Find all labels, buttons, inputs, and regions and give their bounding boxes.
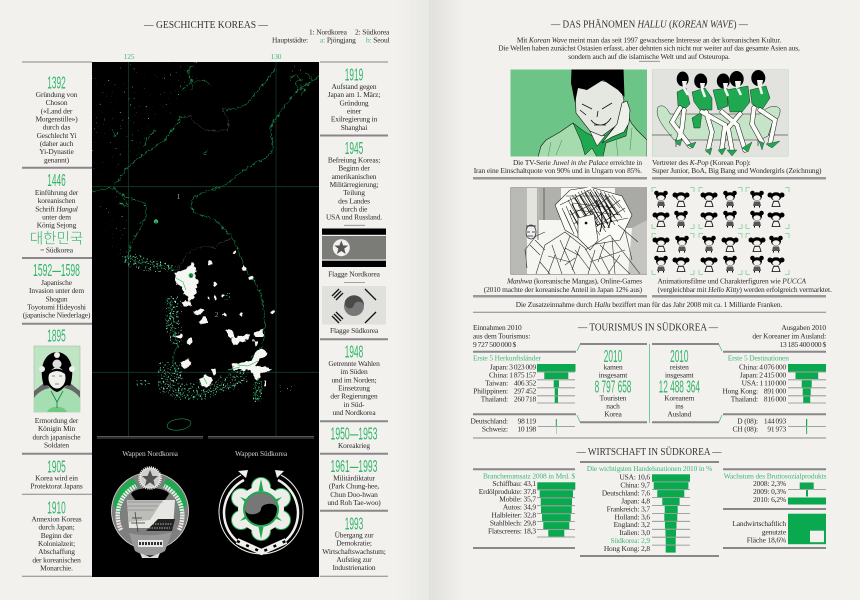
bar chart: GDP growth: 2009: 0,3%	[753, 487, 786, 496]
event 1446	[30, 171, 83, 254]
event 1895: 1895	[47, 326, 66, 346]
bar chart: destinations: 816 000	[764, 394, 786, 404]
note: extra revenue: Die Zusatzeinnahme durch Hallu beziffert man für das Jahr 2008 mit ca. 1 Milliarde Franken.	[516, 300, 782, 309]
dresses	[677, 86, 770, 128]
longitude labels: 125	[124, 52, 135, 61]
bar chart: origin countries: Taiwan:	[485, 378, 508, 388]
event 1919: Aufstand gegen	[332, 82, 377, 91]
bar chart: industry revenue: Autos: 34,9	[503, 503, 536, 512]
event 1895: durch japanische	[33, 432, 81, 441]
bar chart: trade nations: Japan: 4,8	[621, 496, 650, 505]
bar chart: origin countries: 1 875 157	[509, 370, 537, 380]
bar chart: trade nations: Hong Kong: 2,8	[604, 544, 650, 553]
event 1895	[33, 326, 81, 450]
bar chart: GDP growth	[723, 469, 827, 509]
map legend	[272, 28, 390, 44]
event 1945: 1945	[345, 139, 363, 158]
bar chart: GDP growth: Wachstum des Bruttosozialprodukts	[724, 471, 827, 480]
event 1993: Industrienation	[333, 563, 376, 572]
event 1948: Einsetzung	[338, 384, 370, 392]
event 1919: Shanghai	[341, 123, 367, 132]
bar chart: industry revenue: Flatscreens: 18,3	[488, 526, 536, 536]
left timeline column	[22, 62, 92, 576]
map legend: 2: Südkorea	[355, 28, 390, 36]
event 1910: Beginn der	[41, 531, 73, 540]
coastlines	[92, 65, 319, 400]
event 1919: Exilregierung in	[331, 115, 378, 124]
event 1961-1993: 1961—1993	[331, 455, 378, 476]
capital markers	[154, 219, 193, 278]
caption: K-pop: Super Junior, BoA, Big Bang und Wondergirls (Zeichnung)	[652, 166, 822, 175]
event 1592-1598: Toyotomi Hideyoshi	[27, 302, 86, 311]
bar chart: origin countries: 98 119	[518, 416, 536, 426]
bar chart: origin countries: 10 198	[517, 424, 537, 434]
event 1919: einer	[347, 106, 362, 116]
caption: Pucca: (vergleichbar mit Hello Kitty) werden erfolgreich vermarktet.	[658, 285, 832, 294]
bar chart: origin countries: Deutschland:	[470, 416, 508, 426]
event 1910: Kolonialzeit;	[38, 539, 75, 548]
event 1945: Beginn der	[338, 164, 370, 173]
inbound stat	[595, 347, 632, 418]
farmland share	[723, 514, 826, 548]
bar chart: destinations: Erste 5 Destinationen	[728, 354, 789, 363]
bar chart: industry revenue: Halbleiter: 32,8	[492, 511, 536, 520]
event 1993: Aufstieg zur	[336, 555, 372, 564]
inbound stat: 8 797 658	[595, 377, 632, 397]
caption: Flagge Nordkorea: Flagge Nordkorea	[328, 270, 381, 278]
bar chart: destinations	[722, 354, 826, 434]
caption: Manhwa: (2010 machte der koreanische Anteil in Japan 12% aus)	[484, 285, 643, 294]
event 1910: 1910	[47, 498, 66, 517]
event 1446: Schrift Hangul	[35, 204, 78, 213]
longitude labels	[124, 52, 282, 61]
event 1910: Monarchie.	[40, 564, 73, 572]
inbound stat: Korea	[604, 410, 623, 418]
event 1945: Militärregierung;	[330, 180, 378, 189]
farmland share: Landwirtschaftlich	[732, 519, 786, 528]
intro text: Mit Korean Wave meint man das seit 1997 gewachsene Interesse an der koreanischen Kultur.	[517, 36, 781, 44]
map legend: Hauptstädte:	[272, 36, 308, 44]
bar chart: industry revenue: Erdölprodukte: 37,8	[479, 487, 536, 496]
outbound stat	[659, 347, 700, 418]
income text: 9 727 500 000 $	[473, 340, 517, 349]
shoes	[675, 139, 780, 156]
farmland share: Fläche 18,6%	[747, 536, 786, 544]
event 1392: durch das	[43, 123, 70, 132]
event 1993: Wirtschaftswachstum;	[322, 547, 386, 556]
event 1945: amerikanischen	[332, 172, 377, 181]
bar chart: trade nations	[580, 462, 719, 556]
event 1392: Yi-Dynastie	[39, 147, 75, 156]
map legend: 1: Nordkorea	[309, 28, 348, 36]
caption: K-pop: Vertreter des K-Pop (Korean Pop):	[652, 158, 751, 167]
outbound stat: 12 488 364	[659, 377, 700, 397]
event 1446: König Sejong	[37, 221, 77, 230]
income text: Einnahmen 2010	[473, 323, 522, 332]
bar chart: destinations: China:	[739, 362, 758, 372]
bar chart: origin countries: Erste 5 Herkunftsländer	[473, 354, 541, 363]
farmland share: genutzte	[762, 528, 787, 536]
capital markers: a	[155, 219, 157, 224]
heads	[677, 70, 765, 97]
event 1910	[31, 498, 82, 572]
heading: Geschichte Koreas: — GESCHICHTE KOREAS —	[143, 20, 269, 31]
inbound stat: kamen	[603, 362, 623, 372]
event 1446: = Südkorea	[40, 246, 74, 254]
heading: Das Phänomen Hallu: — DAS PHÄNOMEN HALLU (KOREAN WAVE) —	[550, 18, 749, 30]
event 1948: und Nordkorea	[333, 408, 376, 417]
bar chart: destinations: Thailand:	[731, 394, 758, 404]
event 1895: Soldaten	[44, 440, 69, 450]
illustration: Pucca characters	[652, 188, 789, 274]
event 1919: Japan am 1. März;	[328, 90, 380, 99]
event 1592-1598: Shogun	[46, 294, 68, 303]
sofa	[657, 106, 780, 140]
bar chart: industry revenue: Stahlblech: 29,8	[490, 519, 536, 528]
event 1948: im Süden	[340, 367, 368, 376]
bar chart: GDP growth: 2010: 6,2%	[753, 495, 786, 504]
event 1945: Teilung	[343, 188, 365, 197]
illustration: manhwa	[510, 187, 647, 274]
bar chart: destinations: USA:	[742, 378, 758, 388]
event 1446: 1446	[47, 171, 66, 190]
event 1592-1598: Japanische	[41, 278, 73, 287]
heading: Tourismus: — TOURISMUS IN SÜDKOREA —	[577, 322, 719, 334]
longitude labels: 130	[271, 52, 282, 61]
caption: Manhwa: Manhwa (koreanische Mangas), Online-Games	[507, 277, 642, 286]
event 1948	[328, 342, 380, 417]
bar chart: trade nations: England: 3,2	[614, 520, 650, 529]
expenses text: Ausgaben 2010	[781, 323, 826, 332]
inbound stat: 2010	[604, 347, 622, 366]
bar chart: trade nations: Deutschland: 7,6	[602, 488, 650, 498]
book fold shading	[395, 0, 465, 600]
event 1945: Befreiung Koreas;	[328, 156, 380, 164]
event 1945: des Landes	[338, 196, 370, 205]
event 1446: unter dem	[42, 212, 71, 222]
caption: TV series: Die TV-Serie Juwel in the Palace erreichte in	[513, 158, 642, 167]
expenses text: 13 185 400 000 $	[779, 340, 826, 349]
event 1905	[30, 457, 83, 491]
event 1993: Übergang zur	[335, 530, 374, 540]
bar chart: industry revenue: Mobile: 35,7	[499, 495, 536, 504]
event 1905: Korea wird ein	[35, 474, 78, 482]
bar chart: trade nations: Holland: 3,6	[614, 512, 650, 521]
bar chart: origin countries: 3 023 009	[509, 362, 537, 372]
capital markers: b	[190, 273, 193, 278]
bar chart: industry revenue	[473, 469, 575, 548]
event 1392: Choson	[46, 98, 68, 107]
bar chart: trade nations: Italien: 3,0	[619, 528, 650, 537]
bar chart: origin countries: 297 452	[514, 386, 536, 396]
caption: Wappen Nordkorea: Wappen Nordkorea	[122, 449, 179, 458]
expenses text: der Koreaner im Ausland:	[752, 332, 826, 340]
event 1392: Morgenstille»)	[35, 114, 78, 124]
map legend: a: Pjöngjang	[320, 36, 356, 44]
event 1910: Abschaffung	[38, 547, 75, 556]
bar chart: origin countries: 406 352	[514, 378, 536, 388]
event 1919: Gründung	[339, 98, 369, 107]
caption: TV series: Iran eine Einschaltquote von 90% und in Ungarn von 85%.	[474, 166, 642, 175]
outbound stat: Koreanern	[664, 393, 695, 402]
caption: Wappen Südkorea: Wappen Südkorea	[235, 449, 288, 458]
event 1392: 1392	[47, 73, 66, 93]
event 1592-1598: 1592—1598	[33, 259, 80, 280]
portrait: Queen Min	[34, 346, 80, 412]
event 1905: Protektorat Japans	[30, 482, 83, 491]
event 1592-1598: Invasion unter dem	[29, 286, 84, 295]
legs	[672, 108, 775, 150]
emblem: North Korea	[112, 468, 188, 558]
event 1910: Annexion Koreas	[31, 514, 82, 524]
event 1950-1953: 1950—1953	[331, 423, 378, 443]
intro text: Die Wellen haben zunächst Ostasien erfasst, aber dehnten sich nicht nur weiter auf das gesamte Asien aus,	[498, 44, 800, 53]
event 1392: Geschlecht Yi	[37, 131, 76, 140]
inbound stat: nach	[606, 401, 620, 410]
event 1446: Einführung der	[35, 188, 79, 197]
event 1895: Ermordung der	[35, 416, 79, 425]
event 1993: Demokratie;	[336, 539, 372, 548]
bar chart: trade nations: Die wichtigsten Handelsnationen 2010 in %	[587, 464, 712, 473]
event 1948: der Regierungen	[330, 392, 378, 401]
event 1392: (daher auch	[40, 139, 74, 148]
white urban areas	[174, 250, 275, 388]
event 1919: 1919	[345, 65, 363, 84]
bar chart: origin countries: 260 718	[514, 394, 536, 404]
event 1910: der koreanischen	[32, 555, 81, 564]
tourism panel frame	[473, 344, 826, 423]
flag: North Korea	[322, 228, 386, 267]
event 1945	[326, 139, 382, 222]
bar chart: trade nations: Südkorea: 2,9	[610, 536, 650, 545]
bar chart: trade nations: China: 9,7	[620, 480, 650, 490]
inbound stat: Touristen	[600, 393, 627, 402]
bar chart: origin countries: Japan:	[490, 362, 508, 372]
flag: South Korea	[322, 286, 386, 324]
event 1919	[328, 65, 380, 132]
event 1950-1953: Koreakrieg	[338, 441, 370, 450]
event 1961-1993: Chun Doo-hwan	[330, 490, 378, 499]
borders	[177, 108, 232, 270]
bar chart: destinations: 91 973	[767, 424, 787, 434]
outbound stat: ins	[675, 401, 684, 410]
bar chart: destinations: Hong Kong:	[722, 386, 758, 396]
event 1945: durch die	[341, 204, 368, 214]
event 1592-1598: (japanische Niederlage)	[23, 310, 91, 320]
event 1895: Königin Min	[38, 424, 75, 433]
event 1948: in Süd-	[344, 400, 365, 409]
event 1961-1993	[327, 455, 381, 507]
event 1948: Getrennte Wahlen	[328, 359, 380, 368]
bar chart: destinations: 1 110 000	[760, 378, 786, 388]
event 1392: Gründung von	[36, 90, 78, 99]
caption: Pucca: Animationsfilme und Charakterfiguren wie PUCCA	[658, 277, 806, 286]
bar chart: origin countries: China:	[489, 370, 508, 380]
event 1592-1598	[23, 259, 91, 320]
bar chart: destinations: 2 415 000	[759, 370, 787, 380]
event 1961-1993: Militärdiktatur	[333, 474, 376, 482]
event 1392	[35, 73, 78, 164]
bar chart: origin countries: Schweiz:	[482, 424, 508, 434]
bar chart: trade nations: USA: 10,6	[619, 472, 650, 482]
bar chart: destinations: 891 000	[764, 386, 786, 396]
event 1392: genannt)	[44, 155, 70, 164]
bar chart: GDP growth: 2008: 2,3%	[753, 479, 786, 488]
bar chart: industry revenue: Schiffbau: 43,1	[492, 479, 536, 488]
event 1948: 1948	[345, 342, 363, 362]
illustration: TV series man	[510, 69, 647, 157]
bar chart: destinations: 144 093	[764, 416, 786, 426]
bar chart: destinations: 4 076 000	[759, 362, 787, 372]
bar chart: destinations: CH (08):	[732, 424, 758, 434]
bar chart: industry revenue: Branchenumsatz 2008 in Mrd. $	[483, 471, 575, 480]
emblem: South Korea	[219, 470, 303, 554]
income text: aus dem Tourismus:	[473, 332, 530, 340]
illustration: K-pop group	[652, 70, 788, 156]
corner brackets	[652, 188, 789, 274]
outbound stat: 2010	[670, 347, 689, 366]
outbound stat: reisten	[670, 362, 689, 372]
caption: Flagge Südkorea: Flagge Südkorea	[330, 326, 379, 335]
event 1446: 대한민국	[30, 228, 83, 248]
map panel: Korean peninsula	[92, 62, 319, 577]
map divider	[97, 436, 314, 438]
event 1905: 1905	[47, 457, 66, 476]
inbound stat: insgesamt	[599, 371, 628, 380]
intro text: sondern auch auf die islamische Welt und auf Osteuropa.	[568, 52, 730, 61]
country labels: 2	[215, 310, 219, 319]
bar chart: origin countries: Philippinen:	[473, 386, 508, 396]
event 1392: («Land der	[41, 106, 73, 115]
bar chart: destinations: D (08):	[737, 416, 758, 426]
white speckle	[160, 300, 292, 398]
bar chart: origin countries: Thailand:	[481, 394, 508, 404]
country labels: 1	[177, 192, 181, 201]
bar chart: destinations: Japan:	[740, 370, 758, 380]
country labels	[177, 192, 219, 319]
scattered islands and lakes	[92, 62, 319, 262]
event 1993: 1993	[345, 514, 363, 533]
event 1993	[322, 514, 386, 572]
event 1948: und im Norden;	[331, 375, 377, 384]
outbound stat: Ausland	[667, 410, 692, 418]
heading: Wirtschaft: — WIRTSCHAFT IN SÜDKOREA —	[576, 446, 722, 458]
map legend: b: Seoul	[366, 36, 390, 44]
event 1446: koreanischen	[38, 196, 76, 205]
bar chart: origin countries	[470, 354, 576, 434]
event 1961-1993: und Roh Tae-woo)	[327, 498, 381, 507]
event 1961-1993: (Park Chung-hee,	[329, 482, 379, 491]
outbound stat: insgesamt	[665, 371, 695, 380]
right timeline column	[320, 62, 388, 576]
event 1910: durch Japan;	[38, 523, 75, 532]
event 1945: USA und Russland.	[326, 213, 382, 222]
bar chart: trade nations: Frankreich: 3,7	[607, 504, 650, 513]
